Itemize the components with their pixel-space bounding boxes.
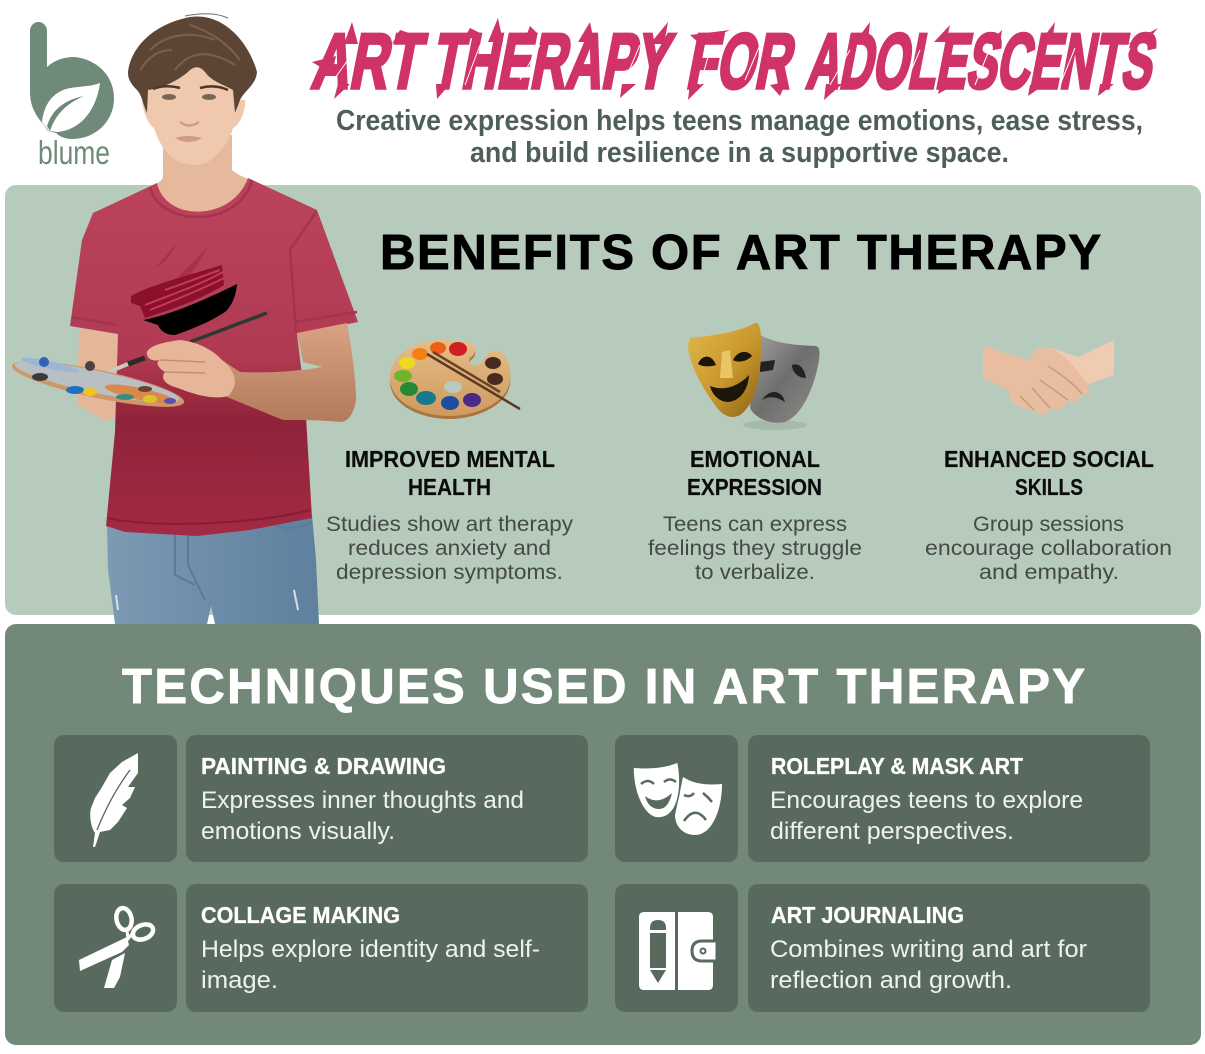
- paint brush: [190, 313, 267, 342]
- benefit text: Group sessions: [973, 513, 1124, 536]
- palette: [9, 352, 187, 416]
- technique copy: [201, 753, 524, 845]
- benefit text: and empathy.: [979, 561, 1119, 584]
- technique copy: Helps explore identity and self-: [201, 936, 540, 963]
- subtitle: Creative expression helps teens manage emotions, ease stress,: [336, 105, 1143, 137]
- benefit text: Teens can express: [663, 513, 847, 536]
- logo: blume: [30, 22, 114, 171]
- benefit heading: IMPROVED MENTAL: [345, 446, 555, 472]
- technique copy: Encourages teens to explore: [770, 787, 1083, 814]
- icon: paint palette: [390, 340, 520, 419]
- benefit text: feelings they struggle: [648, 537, 862, 560]
- technique copy: Combines writing and art for: [770, 936, 1087, 963]
- technique copy: COLLAGE MAKING: [201, 902, 400, 928]
- benefit text: Studies show art therapy: [326, 513, 574, 536]
- technique copy: reflection and growth.: [770, 967, 1012, 994]
- benefit text: depression symptoms.: [336, 561, 563, 584]
- neck: [150, 135, 252, 216]
- benefit heading: [944, 446, 1154, 500]
- benefit heading: ENHANCED SOCIAL: [944, 446, 1154, 472]
- benefit: enhanced social skills: [925, 340, 1172, 584]
- technique: art journaling: [615, 884, 1150, 1012]
- title: THERAPY: [427, 18, 680, 105]
- technique copy: [770, 753, 1083, 845]
- subtitle: [336, 105, 1143, 169]
- technique copy: PAINTING & DRAWING: [201, 753, 446, 779]
- technique copy: emotions visually.: [201, 818, 395, 845]
- hair: [128, 16, 257, 113]
- icon: scissors: [79, 907, 155, 988]
- benefit text: reduces anxiety and: [348, 537, 551, 560]
- benefit heading: SKILLS: [1015, 474, 1083, 500]
- icon: feather: [90, 753, 138, 847]
- hand: [147, 340, 235, 397]
- icon: journal and pencil: [639, 912, 717, 990]
- heading: benefits: BENEFITS OF ART THERAPY: [380, 226, 1101, 280]
- benefit text: [326, 513, 574, 584]
- technique: painting and drawing: [54, 735, 588, 862]
- illustration: teen holding palette and brush: [9, 14, 358, 624]
- panel: benefits background: [5, 185, 1201, 615]
- face: [142, 60, 245, 165]
- technique copy: [770, 902, 1087, 994]
- technique copy: Expresses inner thoughts and: [201, 787, 524, 814]
- right forearm: [217, 323, 356, 422]
- paint strokes on shirt: [131, 240, 237, 335]
- benefit heading: EXPRESSION: [687, 474, 822, 500]
- jeans: [107, 515, 319, 624]
- heading: techniques: TECHNIQUES USED IN ART THERAPY: [122, 660, 1085, 714]
- technique copy: image.: [201, 967, 278, 994]
- technique: collage making: [54, 884, 588, 1012]
- benefit heading: [687, 446, 822, 500]
- benefit: improved mental health: [326, 340, 574, 584]
- facial features: [153, 86, 228, 142]
- logo: blume: blume: [38, 134, 110, 171]
- benefit heading: [345, 446, 555, 500]
- technique copy: [201, 902, 540, 994]
- panel: techniques background: [5, 624, 1201, 1045]
- subtitle: and build resilience in a supportive space.: [470, 137, 1009, 169]
- technique copy: ROLEPLAY & MASK ART: [771, 753, 1023, 779]
- title: [307, 18, 1164, 105]
- icon: masks: [633, 762, 722, 835]
- benefit text: [648, 513, 862, 584]
- benefit: emotional expression: [648, 323, 862, 584]
- title: FOR: [682, 18, 803, 105]
- benefit text: [925, 513, 1172, 584]
- t-shirt: [70, 178, 358, 536]
- technique copy: ART JOURNALING: [771, 902, 964, 928]
- title: ART: [307, 18, 432, 105]
- left arm: [78, 330, 122, 421]
- benefit heading: EMOTIONAL: [690, 446, 820, 472]
- icon: handshake: [983, 340, 1114, 415]
- benefit text: encourage collaboration: [925, 537, 1172, 560]
- benefit text: to verbalize.: [695, 561, 815, 584]
- icon: gold and silver masks: [688, 323, 820, 430]
- technique copy: different perspectives.: [770, 818, 1014, 845]
- technique: roleplay and mask art: [615, 735, 1150, 862]
- benefit heading: HEALTH: [408, 474, 491, 500]
